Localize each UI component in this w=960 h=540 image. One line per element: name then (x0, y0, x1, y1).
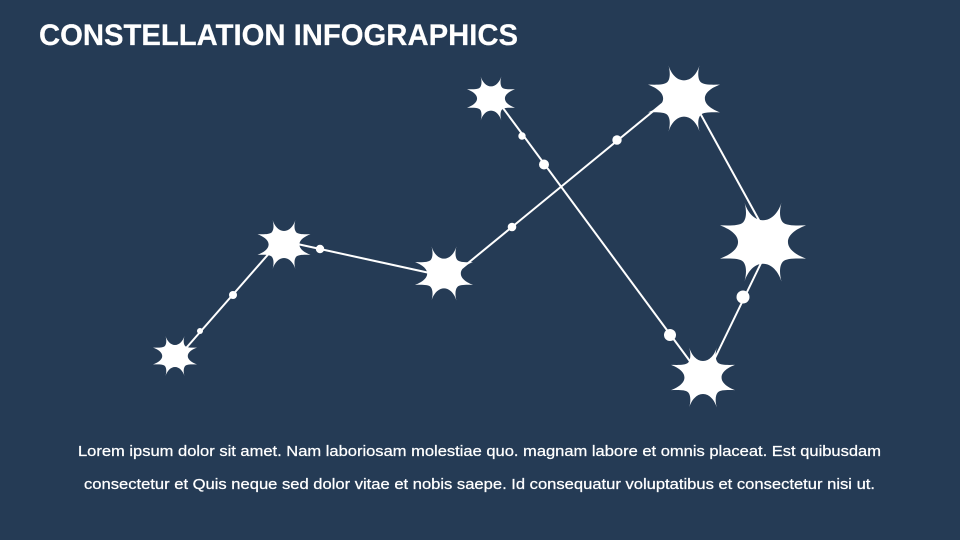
body text: Lorem ipsum dolor sit amet. Nam laboriosam molestiae quo. magnam labore et omnis placeat. Est quibusdam (78, 443, 881, 460)
body text (78, 443, 881, 493)
body text: consectetur et Quis neque sed dolor vitae et nobis saepe. Id consequatur voluptatibus et consectetur nisi ut. (84, 476, 875, 493)
title: CONSTELLATION INFOGRAPHICS (39, 19, 518, 52)
constellation diagram (153, 66, 806, 408)
small dots on lines (197, 132, 750, 341)
connecting lines (180, 99, 763, 364)
stars (153, 66, 806, 408)
